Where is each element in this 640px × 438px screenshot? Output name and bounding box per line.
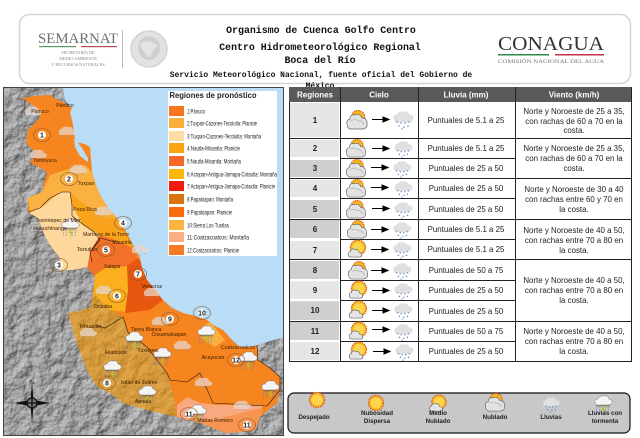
table header: Cielo [369, 90, 389, 100]
panel: forecast map [4, 88, 285, 436]
wind column: con rachas de 60 a 70 en la [525, 117, 623, 126]
wind column: Norte y Noroeste de 40 a 50, [523, 327, 625, 336]
city labels: Tuxtepec [137, 348, 159, 354]
forecast table [289, 87, 632, 362]
legend: regiones de pronóstico: 5:Nautla-Misantla: Montaña [187, 158, 241, 166]
rainfall column: Puntuales de 5.1 a 25 [428, 225, 505, 234]
icon: nubosidad dispersa: Dispersa [364, 418, 391, 425]
icon: lluvias con tormenta: tormenta [592, 418, 619, 425]
wind column: la costa. [559, 296, 589, 305]
title text: Centro Hidrometeorológico Regional [219, 42, 421, 53]
table header: Lluvia (mm) [444, 90, 489, 100]
wind column: Norte y Noroeste de 25 a 35, [523, 144, 625, 153]
sea [63, 88, 285, 347]
region number cells: 8 [313, 266, 318, 275]
region number cells: 3 [313, 164, 318, 173]
icon: despejado [298, 392, 330, 421]
icon: nublado [483, 393, 508, 421]
region markers: 2 [67, 176, 71, 184]
region number cells: 6 [313, 225, 318, 234]
SEMARNAT logo: SECRETARÍA DE [61, 50, 95, 55]
region number cells: 10 [311, 306, 320, 315]
city labels: Teziutlán [77, 247, 97, 253]
region markers: 7 [136, 272, 140, 278]
legend: regiones de pronóstico: 3:Tuxpan-Cazones-Tecolutla: Montaña [187, 134, 261, 140]
city labels: Ixtlán de Juárez [121, 380, 158, 386]
SEMARNAT logo: Y RECURSOS NATURALES [51, 62, 105, 67]
region number cells: 4 [313, 184, 318, 193]
title text: Servicio Meteorológico Nacional, fuente oficial del Gobierno de [170, 71, 472, 80]
rainfall column: Puntuales de 50 a 75 [429, 266, 504, 275]
rainfall column: Puntuales de 25 a 50 [429, 184, 504, 193]
icon: nubosidad dispersa [361, 396, 393, 425]
storm clouds [62, 219, 279, 424]
wind column: costa. [563, 164, 585, 173]
legend: regiones de pronóstico: 2:Tuxpan-Cazones-Tecolutla: Planicie [187, 120, 257, 128]
title text: Organismo de Cuenca Golfo Centro [226, 25, 416, 36]
city labels: Apoala [135, 399, 151, 405]
wind column: con rachas entre 60 y 70 en [525, 195, 623, 204]
table header [289, 87, 632, 102]
wind column [523, 107, 625, 356]
city labels: Poza Rica [73, 207, 97, 213]
legend: regiones de pronóstico: 7:Actopan-Antigua-Jamapa-Cotaxtla: Planicie [187, 184, 275, 190]
title text: Boca del Río [284, 55, 356, 66]
legend: regiones de pronóstico: 6:Actopan-Antigua-Jamapa-Cotaxtla: Montaña [187, 172, 277, 178]
icon: nublado: Nublado [483, 414, 508, 421]
region markers: 12 [232, 358, 240, 364]
wind column: la costa. [559, 347, 589, 356]
CONAGUA logo: COMISIÓN NACIONAL DEL AGUA [498, 59, 605, 65]
icon: medio nublado [426, 395, 451, 425]
rainfall column: Puntuales de 5.1 a 25 [428, 116, 505, 125]
city labels: Orizaba [94, 304, 112, 310]
region number cells: 2 [313, 144, 318, 153]
region markers: 11 [185, 412, 193, 418]
SEMARNAT logo: MEDIO AMBIENTE [59, 56, 97, 61]
icon: lluvias: Lluvias [540, 414, 562, 421]
rain clouds [25, 107, 251, 412]
rainfall column: Puntuales de 5.1 a 25 [428, 144, 505, 153]
region markers: 6 [115, 294, 119, 300]
legend: regiones de pronóstico: 4:Nautla-Misantla: Planicie [187, 146, 240, 152]
wind column: la costa. [559, 205, 589, 214]
header panel [20, 14, 630, 91]
legend: regiones de pronóstico: Regiones de pronóstico [170, 91, 257, 100]
wind column: costa. [563, 126, 585, 135]
icon: national seal [130, 30, 168, 68]
region number cells: 9 [313, 286, 318, 295]
rainfall column [428, 116, 505, 356]
region markers [34, 128, 256, 432]
rainfall column: Puntuales de 50 a 75 [429, 327, 504, 336]
region markers: 1 [40, 132, 44, 140]
region markers: 10 [198, 310, 206, 318]
mountain relief in region 8 [68, 293, 176, 417]
city labels: Veracruz [142, 284, 163, 290]
city labels: Acayucan [202, 355, 224, 361]
city labels: Matías Romero [197, 418, 233, 424]
regions choropleth [10, 90, 285, 436]
region number cells: 11 [311, 327, 320, 336]
wind column: con rachas de 60 a 70 en la [525, 154, 623, 163]
city labels: Huatusco [105, 350, 127, 356]
city labels: Tehuacán [79, 324, 101, 330]
wind column: Norte y Noroeste de 40 a 50, [523, 226, 625, 235]
icon: medio nublado: Medio [429, 410, 447, 417]
legend: regiones de pronóstico: 11:Coatzacoalcos: Montaña [187, 234, 249, 242]
rainfall column: Puntuales de 25 a 50 [429, 164, 504, 173]
CONAGUA logo [498, 33, 605, 65]
city labels: Tezontepec de Mier [35, 218, 81, 224]
title text [170, 25, 472, 91]
region markers: 9 [168, 316, 172, 324]
wind column: Norte y Noroeste de 25 a 35, [523, 107, 625, 116]
wind column: con rachas entre 70 a 80 en [525, 286, 623, 295]
region boundaries [28, 192, 280, 406]
sky icons [346, 110, 413, 361]
legend: regiones de pronóstico: 1:Pánuco [187, 108, 205, 116]
city labels: Xalapa [104, 264, 120, 270]
wind column: con rachas entre 70 a 80 en [525, 236, 623, 245]
table header: Regiones [297, 90, 334, 100]
SEMARNAT logo: SEMARNAT [38, 31, 118, 47]
icon: medio nublado: Nublado [426, 418, 451, 425]
icon: nubosidad dispersa: Nubosidad [361, 410, 393, 417]
title text: México [306, 82, 335, 91]
sky legend [288, 392, 630, 433]
region number cells: 5 [313, 205, 318, 214]
legend: regiones de pronóstico: 12:Coatzacoalcos: Planicie [187, 248, 239, 254]
region markers: 3 [57, 262, 61, 270]
rainfall column: Puntuales de 5.1 a 25 [428, 245, 505, 254]
city labels: Huauchinango [33, 226, 67, 232]
legend: regiones de pronóstico [168, 91, 277, 256]
city labels: Coatzacoalcos [221, 345, 255, 351]
rainfall column: Puntuales de 25 a 50 [429, 307, 504, 316]
rainfall column: Puntuales de 25 a 50 [429, 286, 504, 295]
region number cells [290, 103, 339, 360]
SEMARNAT logo [38, 30, 123, 68]
city labels: Tantoyuca [33, 158, 57, 164]
city labels: Tierra Blanca [131, 327, 161, 333]
table grid [289, 87, 632, 362]
lagoon [74, 138, 88, 162]
region markers: 8 [105, 380, 109, 388]
city labels [31, 103, 255, 424]
CONAGUA logo: CONAGUA [498, 33, 605, 55]
city labels: Misantla [112, 240, 132, 246]
city labels: Pánuco [31, 109, 49, 115]
icon: lluvias con tormenta [588, 396, 622, 425]
region number cells: 12 [311, 347, 320, 356]
icon: despejado: Despejado [298, 414, 330, 421]
icon: compass rose: S [30, 423, 34, 429]
icon: lluvias con tormenta: Lluvias con [588, 410, 622, 417]
wind column: la costa. [559, 246, 589, 255]
legend: regiones de pronóstico: 8:Papaloapan: Montaña [187, 196, 233, 204]
city labels: Pánuco [56, 103, 74, 109]
region markers: 5 [104, 248, 108, 254]
icon: compass rose [14, 380, 50, 429]
region markers: 4 [121, 220, 125, 228]
wind column: Norte y Noroeste de 30 a 40 [524, 185, 624, 194]
region number cells: 1 [313, 116, 318, 125]
legend: regiones de pronóstico: 10:Sierra Los Tuxtlas [187, 222, 229, 230]
city labels: Cosamaloapan [152, 332, 187, 338]
legend: regiones de pronóstico: 9:Papaloapan: Planicie [187, 210, 232, 216]
region markers: 11 [243, 422, 251, 430]
rainfall column: Puntuales de 25 a 50 [429, 347, 504, 356]
region number cells: 7 [313, 246, 318, 255]
city labels: Tuxpan [77, 181, 95, 187]
arrows [371, 117, 390, 354]
icon: lluvias [540, 398, 562, 421]
wind column: Norte y Noroeste de 40 a 50, [523, 276, 625, 285]
city labels: Martínez de la Torre [83, 232, 129, 238]
wind column: con rachas entre 70 a 80 en [525, 337, 623, 346]
rainfall column: Puntuales de 25 a 50 [429, 205, 504, 214]
icon: compass rose: N [30, 380, 34, 386]
table header: Viento (km/h) [549, 90, 600, 100]
